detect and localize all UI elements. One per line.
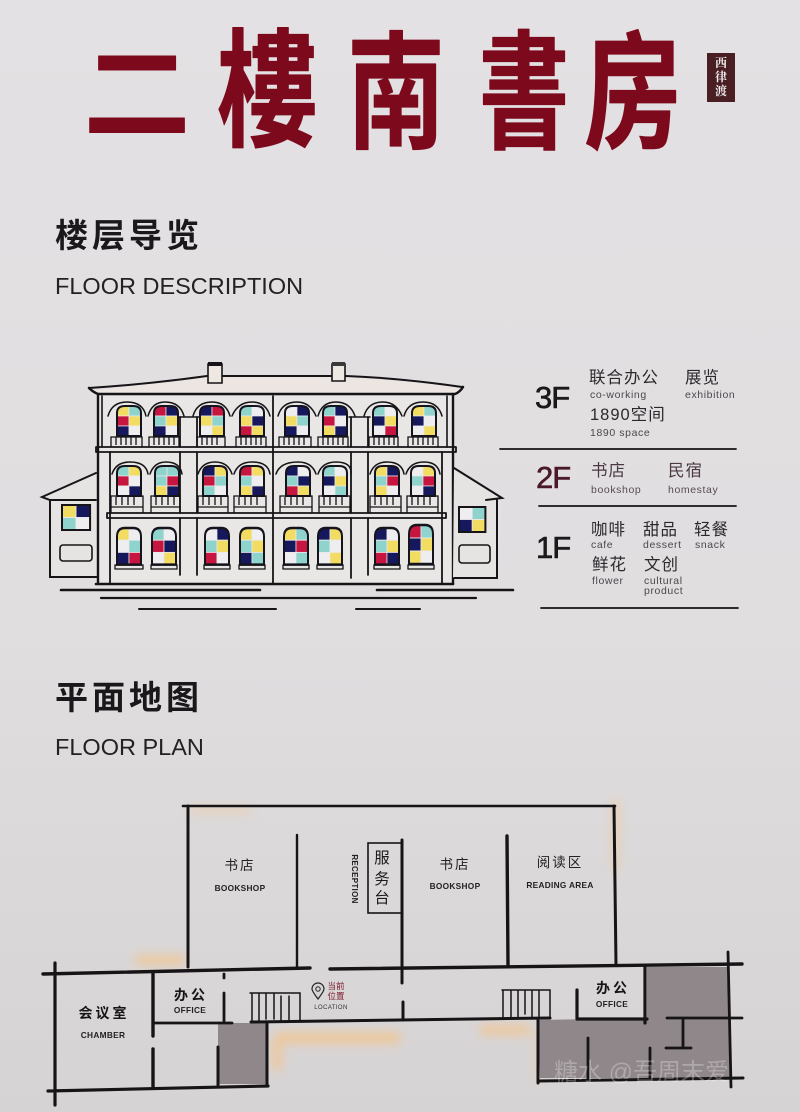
reception desk (350, 843, 402, 913)
room labels: BOOKSHOP (430, 881, 481, 891)
1F: product (644, 585, 683, 597)
room labels: OFFICE (596, 999, 628, 1009)
chimneys (208, 362, 345, 383)
3F: 联合办公 (589, 368, 659, 387)
2F: 民宿 (668, 461, 703, 480)
windows: first floor (117, 525, 433, 565)
1F: 咖啡 (591, 520, 626, 539)
2F: homestay (668, 484, 718, 496)
2F: 书店 (591, 461, 626, 480)
location marker: 位置 (327, 991, 345, 1001)
title seal: 西律渡 (707, 53, 735, 102)
1F: dessert (643, 539, 682, 551)
reception desk: 务 (374, 870, 390, 888)
1F: snack (695, 539, 726, 551)
room labels: CHAMBER (81, 1030, 125, 1040)
3F: co-working (590, 389, 647, 401)
heading: floor description: 楼层导览 (55, 217, 203, 254)
3F: 1890空间 (590, 405, 666, 424)
3F (535, 368, 735, 439)
title seal: 西律渡: 律 (715, 69, 727, 84)
room labels: 书店 (440, 857, 470, 872)
1F: 1F (536, 530, 570, 565)
reception desk: 服 (374, 849, 390, 867)
windows: second floor (117, 466, 435, 496)
heading: floor plan: 平面地图 (55, 679, 203, 716)
heading: floor description (55, 217, 303, 299)
reception desk: RECEPTION (350, 854, 359, 904)
room labels: 会议室 (78, 1005, 130, 1021)
location marker: LOCATION (314, 1005, 348, 1011)
title seal: 西律渡: 渡 (715, 83, 727, 98)
grey service areas (218, 967, 730, 1084)
location marker (312, 981, 348, 1011)
3F: 1890 space (590, 427, 650, 439)
title seal: 西律渡: 西 (715, 55, 727, 70)
title (84, 0, 682, 175)
floor directory (500, 368, 738, 608)
3F: exhibition (685, 389, 735, 401)
heading: floor description: FLOOR DESCRIPTION (55, 273, 303, 299)
windows: third floor (117, 406, 436, 436)
2F: 2F (536, 460, 570, 495)
ground lines (61, 590, 513, 609)
walls (43, 806, 743, 1105)
room labels: OFFICE (174, 1005, 206, 1015)
right wing (453, 468, 502, 578)
left wing (42, 473, 98, 578)
room labels: 阅读区 (537, 855, 583, 870)
3F: 3F (535, 380, 569, 415)
2F: bookshop (591, 484, 641, 496)
roof and walls (89, 376, 463, 584)
3F: 展览 (685, 368, 720, 387)
1F: cafe (591, 539, 613, 551)
1F: 甜品 (643, 520, 678, 539)
1F: 轻餐 (694, 520, 729, 539)
heading: floor plan (55, 679, 204, 760)
room labels: 办公 (596, 980, 630, 996)
1F: 鲜花 (592, 555, 627, 574)
room labels (78, 855, 630, 1040)
stairs (250, 990, 550, 1021)
location marker: 当前 (327, 981, 345, 991)
room labels: READING AREA (526, 880, 594, 890)
1F: flower (592, 575, 624, 587)
1F: 文创 (644, 555, 679, 574)
arches and balconies (108, 402, 442, 569)
room labels: 书店 (224, 858, 256, 873)
1F: cultural (644, 575, 683, 587)
2F (536, 460, 718, 496)
room labels: 办公 (174, 987, 208, 1003)
floor plan (43, 806, 743, 1105)
watermark: 糖水 @吾周末爱 (554, 1059, 729, 1086)
reception desk: 台 (374, 889, 390, 907)
building illustration (42, 362, 513, 609)
1F (536, 520, 729, 597)
title: 二 (84, 9, 190, 163)
room labels: BOOKSHOP (215, 883, 266, 893)
heading: floor plan: FLOOR PLAN (55, 734, 204, 760)
